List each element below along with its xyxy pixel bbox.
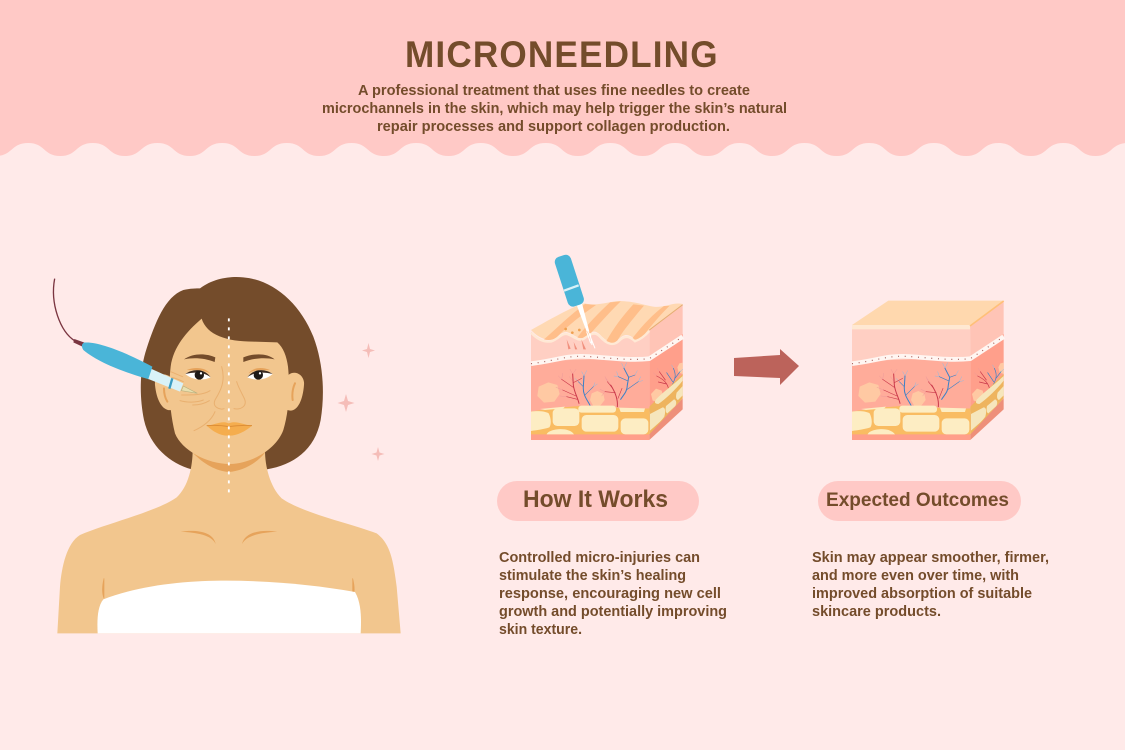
side epidermis [649,305,683,360]
hair [141,277,323,469]
body text [812,550,1049,620]
pill heading [818,481,1021,521]
collarbones [181,531,277,544]
sparkle [362,343,375,358]
lower skin layers [531,334,683,440]
sparkle [338,394,354,412]
intro text: microchannels in the skin, which may help trigger the skin’s natural [322,101,787,117]
header band with wavy edge [0,0,1125,156]
underarm lines [102,578,354,598]
towel [97,581,361,633]
skin diagram: after treatment [852,301,1004,440]
body text: skin texture. [499,622,582,638]
heading text: Expected Outcomes [826,489,1009,511]
lips [207,422,252,436]
intro text: A professional treatment that uses fine needles to create [358,83,750,99]
panel: expected outcomes [812,481,1049,620]
micro-channels [567,339,586,349]
front epidermis [852,325,970,363]
intro text [322,83,787,135]
front epidermis [531,330,649,363]
body text: skincare products. [812,604,941,620]
sparkle [372,447,384,461]
body text: Controlled micro-injuries can [499,550,700,566]
centre dotted line [226,318,232,493]
top edge highlight [852,325,970,329]
body text: and more even over time, with [812,568,1019,584]
body text [499,550,727,638]
panel: how it works [497,481,727,638]
jaw shadow [193,447,265,472]
microneedling pen [54,279,197,393]
lower skin layers [852,334,1004,440]
pill heading [497,481,699,521]
arrow [734,349,799,385]
top surface [852,301,1004,325]
top surface with ridges [531,301,683,342]
ears [155,374,172,410]
nose and wrinkles [171,367,245,431]
face [169,319,289,464]
woman portrait illustration [54,277,401,633]
body text: Skin may appear smoother, firmer, [812,550,1049,566]
heading text: How It Works [523,486,668,513]
neck and shoulders [57,450,401,633]
eyebrows [184,354,215,362]
body text: improved absorption of suitable [812,586,1032,602]
body text: growth and potentially improving [499,604,727,620]
body text: stimulate the skin’s healing [499,568,686,584]
body text: response, encouraging new cell [499,586,721,602]
intro text: repair processes and support collagen production. [377,119,730,135]
skin diagram: during treatment [531,253,683,440]
side epidermis [970,301,1004,360]
eyes [185,368,273,380]
needle tool [553,253,595,348]
title: MICRONEEDLING [405,33,718,75]
